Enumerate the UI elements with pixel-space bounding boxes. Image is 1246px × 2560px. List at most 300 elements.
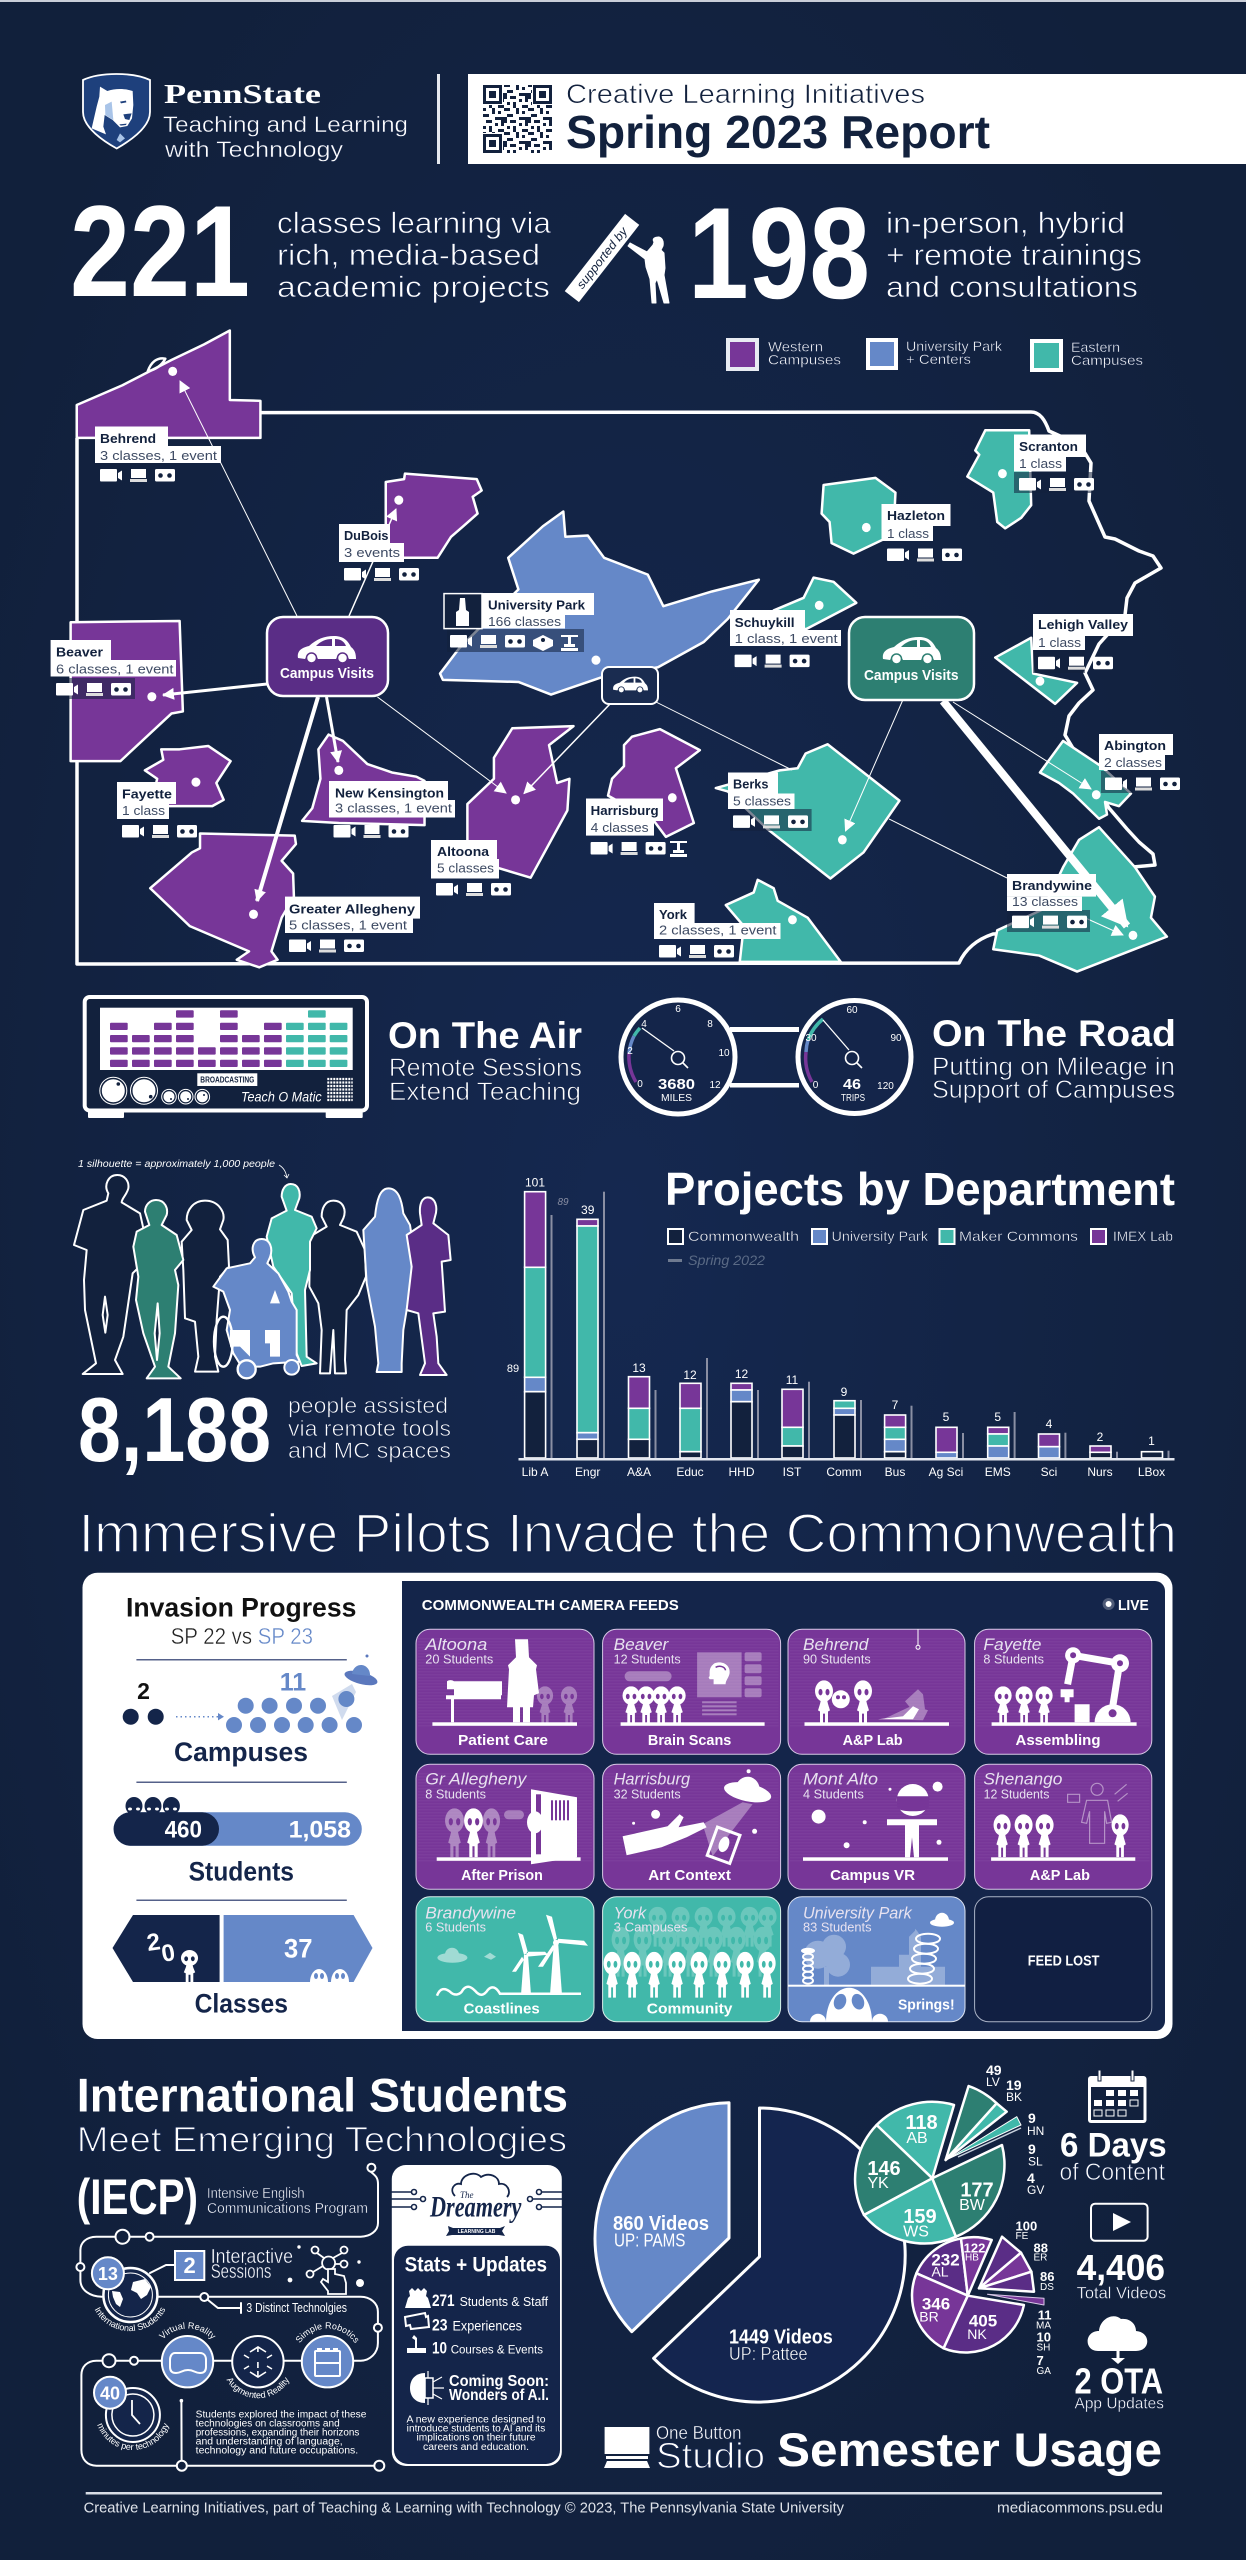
stat: 8,188 people: via remote tools — [288, 1416, 451, 1441]
map legend: + Centers — [906, 351, 971, 367]
pie chart: eastern campuses: 4 — [1027, 2170, 1035, 2186]
text block: IECP description: professions, expanding their horizons — [196, 2428, 359, 2439]
feed: York community: York — [614, 1904, 648, 1923]
feed: Mont Alto campus VR: 4 Students — [803, 1786, 864, 1801]
heading: One Button Studio: One Button — [656, 2423, 742, 2443]
icon: figure holding supported by sign — [565, 214, 669, 303]
bar chart: projects by department: LBox — [1138, 1465, 1165, 1479]
heading: On The Air: Remote Sessions — [389, 1054, 582, 1082]
metric: students: 460 — [165, 1817, 202, 1844]
stat: 198 trainings — [688, 180, 1142, 326]
pie chart: western campuses: 346 — [922, 2294, 950, 2313]
stat: 221 classes: academic projects — [277, 271, 550, 304]
pie chart: western campuses: 88 — [1034, 2240, 1048, 2255]
text block: IECP description: technology and future occupations. — [196, 2446, 358, 2457]
pie chart: eastern campuses: GV — [1027, 2183, 1044, 2197]
bar chart: projects by department: 12 — [735, 1367, 748, 1381]
callout: coming soon: Coming Soon: — [449, 2373, 549, 2390]
feed: Behrend A&P lab: 90 Students — [803, 1651, 871, 1666]
bar chart: projects by department: 89 — [557, 1197, 569, 1208]
campus label: Brandywine: 13 classes — [1012, 894, 1079, 909]
campus label: Abington — [1099, 734, 1180, 793]
text block: IECP description: technologies on classrooms and — [196, 2419, 340, 2430]
stat: 6 days of content: 6 Days — [1060, 2127, 1167, 2165]
feed: Shenango A&P lab — [975, 1764, 1152, 1889]
campus label: Hazleton: Hazleton — [887, 508, 945, 523]
feed: University Park springs: Springs! — [898, 1997, 955, 2014]
panel: The Dreamery: Stats + Updates — [405, 2254, 547, 2277]
stat: 221 classes — [70, 178, 551, 324]
bar: EMS — [988, 1427, 1009, 1458]
map legend: Western — [768, 339, 823, 355]
metric: classes — [112, 1915, 372, 2019]
bar chart: projects by department: 5 — [994, 1410, 1001, 1424]
pie chart: western campuses: HB — [965, 2253, 979, 2264]
feed: feed lost — [975, 1897, 1152, 2022]
slice: PAMS: UP: PAMS — [614, 2231, 685, 2251]
pie chart: eastern campuses: AB — [906, 2130, 928, 2147]
pie chart: western campuses: 405 — [969, 2312, 997, 2331]
icon: UFO beam — [332, 1654, 379, 1720]
stat: OTA updates — [1074, 2316, 1164, 2412]
campus label: Brandywine — [1007, 874, 1096, 932]
campus label: Scranton: Scranton — [1019, 439, 1078, 454]
metric: students: Students — [189, 1857, 294, 1887]
feed: Behrend A&P lab: A&P Lab — [843, 1732, 903, 1749]
panel: invasion progress — [112, 1593, 379, 2019]
pie chart: eastern campuses: HN — [1027, 2124, 1044, 2138]
icon: cloud download — [1088, 2316, 1147, 2364]
campus label: Harrisburg: Harrisburg — [591, 803, 659, 818]
feed: Shenango A&P lab: Shenango — [983, 1769, 1062, 1788]
icon: simple robotics: Simple Robotics — [296, 2322, 358, 2343]
heading: IECP: Intensive English — [207, 2185, 305, 2202]
pie chart: eastern campuses: 19 — [1006, 2077, 1022, 2093]
feed: Behrend A&P lab — [788, 1629, 965, 1754]
heading: On The Road: Putting on Mileage in — [932, 1053, 1175, 1081]
bar chart: projects by department: 12 — [683, 1368, 697, 1382]
bar: Nurs — [1090, 1446, 1111, 1458]
pie chart: western campuses: GA — [1036, 2366, 1051, 2377]
slice: PAMS — [595, 2103, 729, 2332]
pie chart: western campuses: 11 — [1038, 2307, 1051, 2322]
campus label: Scranton — [1014, 434, 1095, 493]
heading: On The Road: Support of Campuses — [932, 1076, 1175, 1104]
callout: 2 interactive sessions: Interactive — [211, 2246, 293, 2268]
bar chart: projects by department: HHD — [728, 1465, 755, 1479]
icon: calendar — [1088, 2070, 1146, 2123]
bar chart: projects by department: Ag Sci — [929, 1465, 963, 1479]
feed: Gr Allegheny after prison: 8 Students — [425, 1786, 486, 1801]
bar chart: projects by department: Bus — [885, 1465, 905, 1479]
icon: Teach O Matic broadcast device — [85, 997, 367, 1118]
icon: podium — [407, 2335, 426, 2353]
campus visits box: eastern: Campus Visits — [864, 667, 958, 684]
campus label: Brandywine: Brandywine — [1012, 878, 1092, 893]
map: western campus shapes — [71, 331, 759, 967]
feed: Fayette assembling: Fayette — [983, 1635, 1041, 1654]
stat: total videos: Total Videos — [1077, 2283, 1166, 2302]
map legend — [728, 338, 1143, 370]
icon: clock with 40 badge — [93, 2376, 170, 2450]
stat: experiences: 23 — [432, 2316, 448, 2335]
pie chart: western campuses: 10 — [1036, 2330, 1051, 2345]
pie chart: eastern campuses: LV — [986, 2075, 1000, 2089]
campus label: New Kensington — [329, 781, 455, 838]
icon: augmented reality — [226, 2335, 290, 2398]
gauge: miles: 0 — [637, 1079, 643, 1090]
campus label: Greater Allegheny: 5 classes, 1 event — [289, 917, 407, 932]
pie chart: western campuses: 100 — [1016, 2219, 1037, 2234]
icon: virtual reality: Virtual Reality — [158, 2322, 216, 2339]
feed: Harrisburg art context: 32 Students — [614, 1786, 681, 1801]
icon: globe with 13 badge: 13 — [98, 2264, 118, 2284]
callout: 2 interactive sessions: Sessions — [211, 2261, 271, 2283]
feed: Gr Allegheny after prison: Gr Allegheny — [425, 1769, 528, 1788]
bar chart: projects by department: 11 — [786, 1373, 799, 1387]
pie chart: western campuses: 7 — [1036, 2353, 1044, 2368]
campus label: York: York — [659, 907, 688, 922]
campus label: DuBois: DuBois — [344, 528, 388, 543]
heading: On The Road: On The Road — [932, 1013, 1176, 1054]
feed: Altoona patient care — [416, 1629, 594, 1754]
bar: Engr — [577, 1219, 598, 1458]
pie chart: eastern campuses — [855, 2062, 1044, 2243]
stat: courses and events — [432, 2338, 543, 2357]
heading: On The Air: On The Air — [388, 1015, 582, 1056]
gauge: miles: 3680 — [658, 1076, 695, 1093]
feed: Mont Alto campus VR: Campus VR — [830, 1867, 915, 1884]
stat: 221 classes: classes learning via — [277, 207, 551, 240]
stat: total videos — [1077, 2204, 1166, 2302]
map legend: Eastern — [1071, 339, 1120, 355]
pie chart: eastern campuses: 9 — [1028, 2110, 1036, 2126]
map legend: Campuses — [1071, 352, 1143, 368]
panel: invasion — [82, 1573, 1172, 2039]
campus label: New Kensington: New Kensington — [335, 786, 444, 801]
panel: invasion progress: Invasion Progress — [126, 1593, 356, 1623]
icon: QR code — [483, 85, 552, 153]
gauge: miles: 12 — [709, 1080, 721, 1091]
slice: Pattee: 1449 Videos — [729, 2326, 833, 2348]
stat: total videos: 4,406 — [1077, 2247, 1165, 2288]
feed: Shenango A&P lab: A&P Lab — [1030, 1867, 1090, 1884]
campus label: Hazleton: 1 class — [887, 526, 930, 541]
circuit diagram: IECP pathway — [75, 2162, 386, 2472]
stat: 6 days of content — [1060, 2070, 1167, 2186]
campus visits box: University Park — [602, 667, 658, 704]
feed: Shenango A&P lab: 12 Students — [984, 1786, 1050, 1801]
heading: International Students: International Students — [77, 2069, 568, 2122]
icon: augmented reality: Augmented Reality — [226, 2377, 290, 2398]
bar: Educ — [680, 1383, 701, 1458]
metric: students: 1,058 — [289, 1817, 351, 1844]
icon: Teach O Matic broadcast device: BROADCASTING — [200, 1076, 254, 1085]
pie chart: University Park videos — [595, 2103, 905, 2402]
heading: Projects by Department: Projects by Department — [665, 1163, 1175, 1215]
panel: commonwealth camera feeds — [402, 1581, 1165, 2031]
map: route arrows — [163, 381, 1127, 935]
campus label: Harrisburg: 4 classes — [591, 820, 649, 835]
report title bar — [468, 74, 1246, 164]
bar: Sci — [1038, 1434, 1060, 1458]
logo: Dreamery: LEARNING LAB — [458, 2229, 496, 2235]
campus label: Behrend: Behrend — [100, 431, 156, 446]
footer — [84, 2492, 1163, 2517]
icon: Penn State shield — [83, 74, 150, 148]
logo text: PennState — [164, 79, 321, 109]
gauge: trips: 120 — [877, 1081, 894, 1092]
campus visits box: eastern — [849, 617, 974, 700]
gauge: miles: MILES — [661, 1092, 692, 1104]
gauge: miles: 2 — [627, 1046, 633, 1057]
feed: Altoona patient care: Patient Care — [458, 1732, 548, 1749]
campus label: Altoona: Altoona — [437, 844, 490, 859]
heading: On The Road — [932, 1013, 1176, 1104]
icon: clock with 40 badge: minutes per technology — [97, 2423, 170, 2450]
feed: Fayette assembling: 8 Students — [983, 1651, 1044, 1666]
icon: touch network — [288, 2246, 364, 2294]
campus label: Altoona: 5 classes — [437, 861, 495, 876]
feed: University Park springs: University Park — [803, 1904, 913, 1923]
stat: courses and events: 10 — [432, 2338, 447, 2357]
feed: Beaver brain scans — [603, 1629, 781, 1754]
campus visits box: western — [267, 617, 388, 696]
campus label: New Kensington: 3 classes, 1 event — [335, 800, 452, 815]
metric: students — [114, 1797, 362, 1887]
icon: person in wheelchair — [213, 1239, 300, 1378]
campus label: Hazleton — [882, 504, 962, 562]
gauge: miles: 4 — [641, 1019, 647, 1030]
gauge: miles: 8 — [707, 1019, 713, 1030]
heading: Semester Usage: Semester Usage — [777, 2423, 1162, 2476]
stat: OTA updates: App Updates — [1074, 2395, 1164, 2412]
icon: studio monitor — [604, 2427, 650, 2468]
feed: Brandywine coastlines: 6 Students — [425, 1920, 486, 1935]
pie chart: eastern campuses: 159 — [903, 2206, 937, 2228]
panel: commonwealth camera feeds: COMMONWEALTH CAMERA FEEDS — [422, 1597, 679, 1614]
pie chart: western campuses: 232 — [931, 2251, 960, 2270]
slice: Pattee — [654, 2108, 905, 2402]
pie chart: eastern campuses: BK — [1006, 2090, 1022, 2104]
pie chart: eastern campuses: 9 — [1028, 2141, 1036, 2157]
pie chart: western campuses: DS — [1040, 2282, 1054, 2293]
callout: 2 interactive sessions — [175, 2246, 293, 2283]
chart legend: University Park — [832, 1228, 929, 1244]
feed: Fayette assembling: Assembling — [1015, 1732, 1100, 1749]
bar: A&A — [628, 1377, 650, 1458]
gauge: trips: 46 — [843, 1076, 861, 1093]
footer: mediacommons.psu.edu — [997, 2501, 1163, 2517]
heading: On The Air: Extend Teaching — [389, 1078, 581, 1106]
callout: coming soon: implications on their future — [416, 2433, 536, 2444]
bar chart: projects by department: Engr — [575, 1465, 600, 1479]
bar: HHD — [731, 1383, 752, 1458]
gauge: trips: TRIPS — [841, 1092, 865, 1104]
label: 3 distinct technologies: 3 Distinct Technolgies — [246, 2300, 347, 2315]
bar: LBox — [1142, 1452, 1162, 1458]
pie chart: eastern campuses: 49 — [986, 2062, 1002, 2078]
campus label: Behrend — [95, 426, 221, 482]
bar chart: projects by department: IST — [783, 1465, 802, 1479]
campus label: University Park: University Park — [488, 598, 586, 612]
feed: Beaver brain scans: Brain Scans — [648, 1732, 731, 1749]
report title text: Spring 2023 Report — [566, 106, 990, 158]
bar chart: projects by department: 7 — [892, 1398, 899, 1412]
feed: Gr Allegheny after prison: After Prison — [461, 1867, 543, 1884]
stat: students and staff — [432, 2291, 548, 2310]
callout: coming soon — [406, 2373, 549, 2453]
metric: classes: 0 — [159, 1939, 177, 1968]
bar chart: projects by department: 89 — [507, 1363, 519, 1375]
bar chart: projects by department: 39 — [581, 1203, 595, 1217]
bar chart: projects by department — [507, 1176, 1174, 1479]
bar chart: projects by department: A&A — [627, 1465, 651, 1479]
map legend: Campuses — [768, 352, 841, 368]
pie chart: eastern campuses: WS — [903, 2224, 929, 2241]
feed: Altoona patient care: Altoona — [424, 1635, 487, 1654]
gauge: miles: 6 — [675, 1004, 681, 1015]
metric: campuses: Campuses — [174, 1737, 308, 1767]
bar chart: projects by department: 2 — [1097, 1430, 1104, 1444]
pie chart: eastern campuses: 118 — [905, 2112, 938, 2134]
pie chart: eastern campuses: 146 — [867, 2158, 901, 2180]
feed: Mont Alto campus VR: Mont Alto — [803, 1769, 878, 1788]
bar chart: projects by department: Comm — [826, 1465, 862, 1479]
metric: classes: 37 — [284, 1934, 312, 1964]
note: silhouette scale — [78, 1158, 289, 1178]
logo text: with Technology — [164, 137, 343, 162]
campus label: Fayette — [117, 782, 197, 838]
campus label: Schuylkill: 1 class, 1 event — [735, 631, 838, 646]
campus label: Beaver: Beaver — [56, 645, 103, 660]
feed: Beaver brain scans: Beaver — [614, 1635, 670, 1654]
slice: PAMS: 860 Videos — [613, 2213, 709, 2235]
campus label: Schuylkill — [730, 610, 841, 668]
stat: 221 classes: rich, media-based — [277, 239, 540, 272]
icon: AI brain — [410, 2371, 444, 2405]
gauge: trips — [798, 1000, 911, 1114]
logo: Dreamery: The — [460, 2190, 474, 2200]
bar chart: projects by department: Nurs — [1087, 1465, 1113, 1479]
campus label: Scranton: 1 class — [1019, 456, 1063, 471]
stat: students and staff: 271 — [432, 2291, 455, 2310]
footer: Creative Learning Initiatives, part of Teaching & Learning with Technology © 2023, The Pennsylvania State University — [84, 2501, 845, 2517]
bar chart: projects by department: 4 — [1046, 1417, 1053, 1431]
pie chart: western campuses: BR — [919, 2309, 939, 2325]
feed: Harrisburg art context: Art Context — [648, 1867, 731, 1884]
campus label: Harrisburg — [586, 798, 687, 857]
report title text: Creative Learning Initiatives — [566, 79, 925, 109]
pie chart: eastern campuses: SL — [1028, 2155, 1043, 2169]
bar: Ag Sci — [936, 1427, 957, 1458]
stat: courses and events: Courses & Events — [451, 2342, 543, 2356]
pie chart: western campuses: 122 — [964, 2241, 985, 2256]
stat: 8,188 people: and MC spaces — [288, 1438, 451, 1463]
bar chart: projects by department: Sci — [1041, 1465, 1057, 1479]
campus label: Beaver: 6 classes, 1 event — [56, 662, 174, 676]
campus label: Abington: Abington — [1104, 738, 1166, 753]
heading: One Button Studio — [604, 2423, 765, 2476]
logo: Dreamery: Dreamery — [429, 2191, 522, 2224]
heading: IECP: (IECP) — [77, 2169, 198, 2225]
pie chart: western campuses: SH — [1036, 2343, 1050, 2354]
metric: campuses: 2 — [137, 1678, 150, 1704]
gauge: miles: 10 — [718, 1048, 730, 1059]
gauge: trips: 0 — [813, 1080, 819, 1091]
callout: coming soon: Wonders of A.I. — [449, 2387, 549, 2404]
feed: Brandywine coastlines — [416, 1897, 594, 2022]
chart legend — [668, 1228, 1173, 1268]
callout: coming soon: introduce students to AI and its — [407, 2424, 545, 2435]
pie chart: western campuses: FE — [1016, 2231, 1029, 2242]
feed: York community: Community — [647, 2001, 733, 2018]
campus label: Abington: 2 classes — [1104, 755, 1163, 770]
text block: IECP description: and understanding of language, — [196, 2437, 343, 2448]
bar: IST — [782, 1389, 803, 1458]
pie chart: eastern campuses: 177 — [960, 2180, 994, 2202]
campus label: DuBois — [339, 524, 419, 581]
gauges: miles and trips — [621, 1000, 911, 1114]
feed: York community — [603, 1897, 781, 2022]
campus label: DuBois: 3 events — [344, 545, 401, 560]
stat: 198 trainings: + remote trainings — [886, 239, 1142, 272]
stat: students and staff: Students & Staff — [460, 2294, 548, 2309]
campus label: Greater Allegheny — [285, 897, 420, 952]
gauge: trips: 30 — [805, 1033, 817, 1044]
bar chart: projects by department: 13 — [632, 1361, 646, 1375]
chart legend: Spring 2022 — [688, 1252, 765, 1268]
heading: International Students: Meet Emerging Technologies — [77, 2121, 567, 2160]
campus visits box: western: Campus Visits — [280, 665, 374, 682]
icon: play button — [1091, 2204, 1148, 2241]
feed: Altoona patient care: 20 Students — [425, 1651, 494, 1666]
campus label: Fayette: Fayette — [122, 786, 172, 802]
bar chart: projects by department: 1 — [1148, 1434, 1155, 1448]
feed: Fayette assembling — [975, 1629, 1152, 1754]
logo text: Teaching and Learning — [163, 112, 408, 137]
campus label: Behrend: 3 classes, 1 event — [100, 448, 217, 463]
stat: 8,188 people — [78, 1380, 451, 1481]
logo text — [163, 79, 408, 162]
callout: coming soon: A new experience designed to — [406, 2415, 546, 2426]
stat: 221 classes: 221 — [70, 178, 250, 324]
feed: University Park springs: 83 Students — [803, 1920, 872, 1935]
feed: Brandywine coastlines: Brandywine — [425, 1904, 516, 1923]
bar: Lib A — [525, 1192, 546, 1458]
heading: IECP — [77, 2169, 368, 2225]
campus label: Lehigh Valley: 1 class — [1038, 635, 1082, 650]
stat: 8,188 people: 8,188 — [78, 1380, 271, 1481]
bar chart: projects by department: Lib A — [522, 1465, 548, 1479]
campus label: Lehigh Valley — [1033, 614, 1133, 673]
bar: Comm — [834, 1401, 855, 1458]
feed: Harrisburg art context: Harrisburg — [614, 1769, 691, 1788]
stat: experiences — [432, 2316, 522, 2335]
icon: globe with 13 badge — [90, 2256, 165, 2332]
campus label: Berks: Berks — [733, 776, 768, 792]
stat: experiences: Experiences — [452, 2318, 522, 2334]
panel: commonwealth camera feeds: LIVE — [1118, 1597, 1149, 1614]
icon: virtual reality — [158, 2322, 216, 2388]
stat: 198 trainings: in-person, hybrid — [886, 207, 1125, 240]
campus label: York: 2 classes, 1 event — [659, 922, 777, 938]
bar chart: projects by department: 9 — [841, 1385, 848, 1399]
icon: simple robotics — [296, 2322, 358, 2388]
stat: 6 days of content: of Content — [1060, 2159, 1165, 2186]
bar chart: projects by department: EMS — [985, 1465, 1011, 1479]
stat: OTA updates: 2 OTA — [1074, 2360, 1163, 2401]
